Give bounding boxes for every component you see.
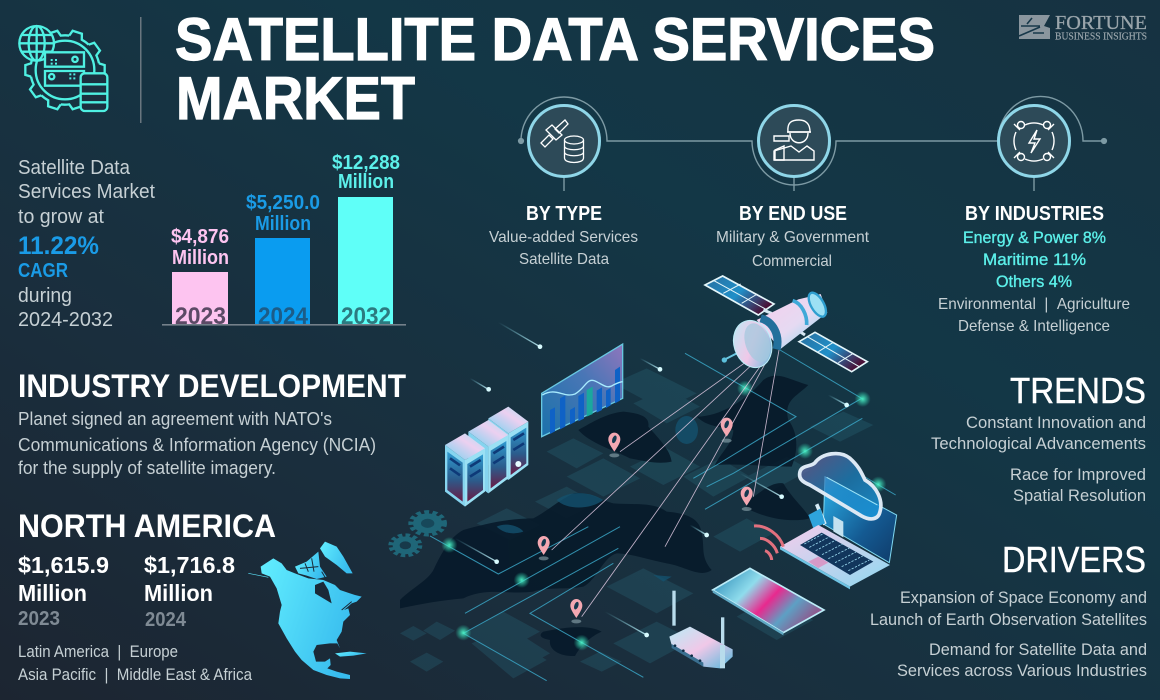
header icon: globe, gear, server and database <box>19 26 107 112</box>
logo: Fortune Business Insights: FORTUNE <box>1055 12 1147 34</box>
North America panel <box>18 508 276 684</box>
drivers: Services across Various Industries <box>897 661 1147 680</box>
North America 2023 value <box>18 552 109 630</box>
by end use: Military & Government <box>716 229 870 246</box>
by end use: BY END USE <box>739 203 847 225</box>
trends: Constant Innovation and <box>966 413 1146 432</box>
CAGR text block: 2024-2032 <box>18 309 113 331</box>
header divider <box>140 17 142 123</box>
dark world map <box>400 376 810 656</box>
trends: Spatial Resolution <box>1013 486 1146 505</box>
by type: BY TYPE <box>526 203 602 225</box>
blue islands on the map <box>497 416 698 582</box>
CAGR text block: 11.22% <box>18 232 99 260</box>
comets <box>455 322 849 637</box>
title <box>175 6 935 132</box>
drivers: Expansion of Space Economy and <box>900 588 1147 607</box>
CAGR text block: to grow at <box>18 206 104 228</box>
industry development: Planet signed an agreement with NATO's <box>18 409 332 429</box>
by industries <box>938 203 1130 335</box>
icon: server rack middle <box>468 420 508 493</box>
North America 2024 value <box>144 552 235 631</box>
bar 2024: Million <box>255 213 311 235</box>
by type <box>489 203 638 268</box>
bar 2032: Million <box>338 171 394 193</box>
logo: Fortune Business Insights: BUSINESS INSIGHTS <box>1055 32 1147 42</box>
circuit lines <box>430 350 896 681</box>
illustration: isometric satellite network scene <box>391 276 897 681</box>
bar chart: market size <box>162 152 406 330</box>
bar 2024: $5,250.0 <box>246 192 320 214</box>
floor tiles <box>400 368 873 678</box>
bar 2023: Million <box>172 247 229 269</box>
title: MARKET <box>176 65 415 132</box>
by end use <box>716 203 870 270</box>
CAGR text block: CAGR <box>18 260 68 282</box>
North America 2024 value: Million <box>144 580 213 606</box>
icon: server rack back <box>488 407 528 480</box>
other regions <box>18 643 253 684</box>
icon: satellite and database <box>528 106 600 176</box>
by industries: Defense & Intelligence <box>958 318 1110 335</box>
drivers: Launch of Earth Observation Satellites <box>870 610 1147 629</box>
North America 2024 value: 2024 <box>145 609 187 631</box>
North America 2023 value: 2023 <box>18 608 60 630</box>
laptop with cloud <box>780 454 897 589</box>
icon: gears <box>391 512 444 555</box>
bar 2023: 2023 <box>175 303 226 330</box>
drivers: Demand for Satellite Data and <box>929 640 1147 659</box>
CAGR text block: Services Market <box>18 181 155 203</box>
by industries: Maritime 11% <box>983 251 1086 269</box>
icon: energy plugs <box>998 106 1070 176</box>
bar 2023 <box>171 226 229 330</box>
North America 2023 value: Million <box>18 580 87 606</box>
bar 2024 <box>246 192 320 330</box>
by type: Satellite Data <box>519 251 609 268</box>
trends: TRENDS <box>1010 370 1146 411</box>
bar 2024: 2024 <box>258 303 309 330</box>
industry development <box>18 368 406 478</box>
other regions: Latin America | Europe <box>18 643 178 661</box>
chart panel <box>542 344 623 437</box>
North America panel: NORTH AMERICA <box>18 508 276 544</box>
CAGR text block <box>18 157 155 331</box>
icon: wifi arcs <box>754 526 783 560</box>
icon: soldier and tank <box>758 106 830 176</box>
connector line and arcs <box>519 96 1106 191</box>
industry development: INDUSTRY DEVELOPMENT <box>18 368 406 404</box>
logo: Fortune Business Insights <box>1019 12 1147 42</box>
circuit nodes <box>441 380 886 651</box>
bar 2032 <box>332 152 400 330</box>
icon: server rack front <box>445 433 485 507</box>
bar 2032: 2032 <box>341 303 391 330</box>
bar 2023: $4,876 <box>171 226 229 248</box>
North America 2023 value: $1,615.9 <box>18 552 109 578</box>
by type: Value-added Services <box>489 229 638 246</box>
trends <box>931 370 1146 505</box>
CAGR text block: Satellite Data <box>18 157 131 179</box>
router <box>669 591 733 668</box>
by industries: Energy & Power 8% <box>963 229 1106 247</box>
title: SATELLITE DATA SERVICES <box>175 6 935 73</box>
industry development: Communications & Information Agency (NCIA) <box>18 435 376 455</box>
other regions: Asia Pacific | Middle East & Africa <box>18 666 253 684</box>
bar 2032: $12,288 <box>332 152 400 174</box>
by industries: BY INDUSTRIES <box>965 203 1104 225</box>
by industries: Environmental | Agriculture <box>938 296 1130 313</box>
satellite <box>705 276 867 373</box>
drivers <box>870 539 1147 680</box>
North America 2024 value: $1,716.8 <box>144 552 235 578</box>
map pins <box>538 418 753 623</box>
industry development: for the supply of satellite imagery. <box>18 458 276 478</box>
map: North America <box>248 542 367 679</box>
drivers: DRIVERS <box>1002 539 1146 580</box>
beams <box>552 350 779 617</box>
by end use: Commercial <box>752 253 832 270</box>
CAGR text block: during <box>18 285 72 307</box>
trends: Race for Improved <box>1010 465 1146 484</box>
trends: Technological Advancements <box>931 434 1146 453</box>
by industries: Others 4% <box>996 273 1072 291</box>
comet on the back rack <box>515 461 521 467</box>
phone <box>713 568 824 635</box>
